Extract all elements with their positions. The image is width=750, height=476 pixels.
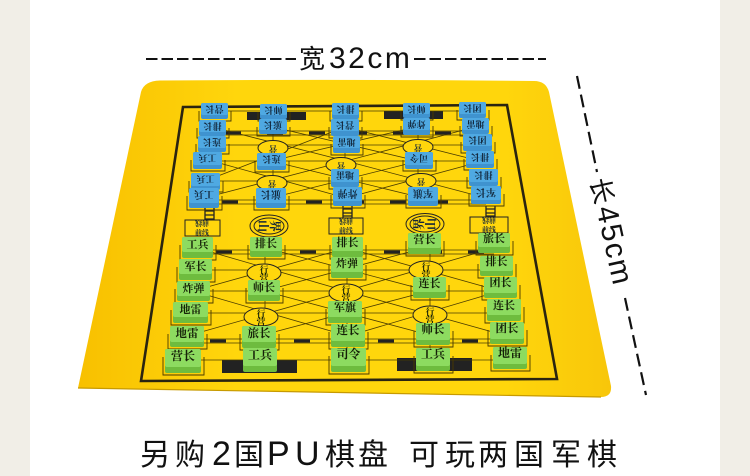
camps upper side: 营: [414, 142, 422, 153]
blue pieces: 营长: [336, 119, 354, 132]
camps lower side: 行: [259, 263, 269, 276]
board frame: [141, 105, 557, 381]
caption: 棋: [325, 439, 355, 472]
front line box middle: [329, 216, 363, 236]
blue pieces: 军长: [476, 186, 496, 201]
camps lower side: [244, 260, 447, 328]
camps lower side: 营: [256, 315, 266, 328]
green pieces: 排长: [336, 234, 358, 250]
front line box middle: 前线: [339, 226, 353, 236]
blue pieces: 排长: [474, 169, 493, 182]
green pieces: 连长: [336, 322, 360, 338]
green pieces: 地雷: [180, 301, 202, 317]
green pieces: 炸弹: [335, 255, 358, 271]
mountain circle left: 山: [255, 220, 272, 232]
green pieces: 地雷: [176, 325, 199, 341]
green pieces: [163, 230, 530, 375]
green pieces: 地雷: [498, 344, 522, 361]
mountain circle right: [406, 214, 444, 234]
green pieces: 师长: [422, 321, 445, 337]
blue pieces: 工兵: [196, 173, 215, 186]
caption: 国: [234, 439, 264, 472]
blue pieces: 团长: [468, 134, 487, 147]
blue pieces: 师长: [264, 104, 283, 117]
green pieces: 工兵: [421, 345, 446, 362]
blue pieces: 炸弹: [407, 118, 427, 131]
camps lower side: 行: [425, 305, 435, 318]
caption: 棋: [587, 439, 617, 472]
caption: 盘: [358, 439, 388, 472]
blue pieces: 炸弹: [338, 187, 358, 202]
front line box left: 前线: [195, 228, 209, 238]
caption: U: [295, 435, 320, 473]
camps lower side: 营: [341, 291, 351, 304]
front line box right: [470, 215, 508, 235]
mountain circle right: 界: [410, 218, 427, 230]
green pieces: 炸弹: [182, 280, 204, 296]
front line box right: 前线: [482, 225, 496, 235]
width dimension label: 宽: [299, 44, 325, 74]
grid lines: [183, 111, 510, 360]
blue pieces: 连长: [203, 136, 221, 149]
green pieces: 旅长: [483, 230, 505, 246]
blue pieces: 排长: [336, 103, 355, 116]
yellow game board: [78, 80, 611, 397]
camps upper side: 营: [337, 160, 345, 171]
blue pieces: 旅长: [261, 188, 281, 203]
caption: 可: [409, 439, 439, 472]
camps lower side: 营: [425, 313, 435, 326]
black labels on the back rows: [222, 111, 472, 373]
blue pieces: 师长: [407, 103, 426, 116]
blue pieces: 工兵: [193, 188, 214, 203]
camps lower side: 行: [421, 260, 431, 273]
green pieces: 营长: [414, 231, 436, 247]
green pieces: 旅长: [248, 325, 271, 341]
camps lower side: 营: [259, 271, 269, 284]
blue pieces: 司令: [410, 152, 428, 165]
blue pieces: 军旗: [412, 187, 433, 202]
green pieces: 团长: [496, 320, 519, 336]
length dimension label: 长: [584, 175, 619, 207]
caption: 2: [212, 435, 231, 473]
front line box left: 前线: [195, 218, 209, 228]
caption: 国: [514, 439, 544, 472]
front line box right: 前线: [482, 215, 496, 225]
mountain circle left: [250, 215, 288, 237]
green pieces: 工兵: [186, 236, 209, 252]
blue pieces: 地雷: [337, 136, 356, 149]
front line box middle: 前线: [339, 216, 353, 226]
front line box left: [185, 218, 220, 238]
camps upper side: 营: [269, 143, 277, 154]
length dimension label: [577, 76, 646, 395]
caption: 购: [175, 439, 205, 472]
green pieces: 团长: [490, 274, 512, 290]
mountain circle left: 界: [267, 220, 284, 232]
green pieces: 军旗: [334, 299, 357, 315]
green pieces: 排长: [486, 253, 508, 269]
camps upper side: 营: [268, 178, 276, 189]
camps lower side: 行: [341, 283, 351, 296]
blue pieces: 排长: [471, 151, 489, 164]
camps lower side: 行: [256, 307, 266, 320]
width dimension label: 32cm: [329, 42, 412, 75]
caption: 另: [140, 439, 170, 472]
green pieces: 师长: [253, 279, 275, 295]
green pieces: 工兵: [248, 346, 273, 363]
mountain circle right: 山: [422, 218, 439, 230]
width dimension label: [146, 42, 546, 75]
camps upper side: 营: [417, 176, 425, 187]
blue pieces: 团长: [463, 102, 482, 115]
blue pieces: 地雷: [336, 169, 354, 182]
length dimension label: 45cm: [589, 203, 639, 289]
green pieces: 司令: [336, 345, 361, 362]
caption: 玩: [445, 439, 475, 472]
camps lower side: 营: [421, 268, 431, 281]
blue pieces: 营长: [205, 103, 224, 116]
blue pieces: [187, 102, 504, 210]
blue pieces: 旅长: [264, 119, 282, 132]
caption: 两: [478, 439, 508, 472]
green pieces: 军长: [184, 258, 206, 274]
green pieces: 排长: [255, 235, 277, 251]
blue pieces: 工兵: [198, 152, 217, 165]
blue pieces: 地雷: [466, 118, 485, 131]
camps upper side: [257, 140, 436, 190]
blue pieces: 连长: [262, 153, 281, 166]
caption: 军: [551, 439, 581, 472]
railway lines: [187, 131, 507, 343]
caption: P: [267, 435, 290, 473]
green pieces: 连长: [493, 297, 515, 313]
green pieces: 连长: [418, 275, 440, 291]
blue pieces: 排长: [203, 120, 222, 133]
green pieces: 营长: [171, 347, 195, 364]
